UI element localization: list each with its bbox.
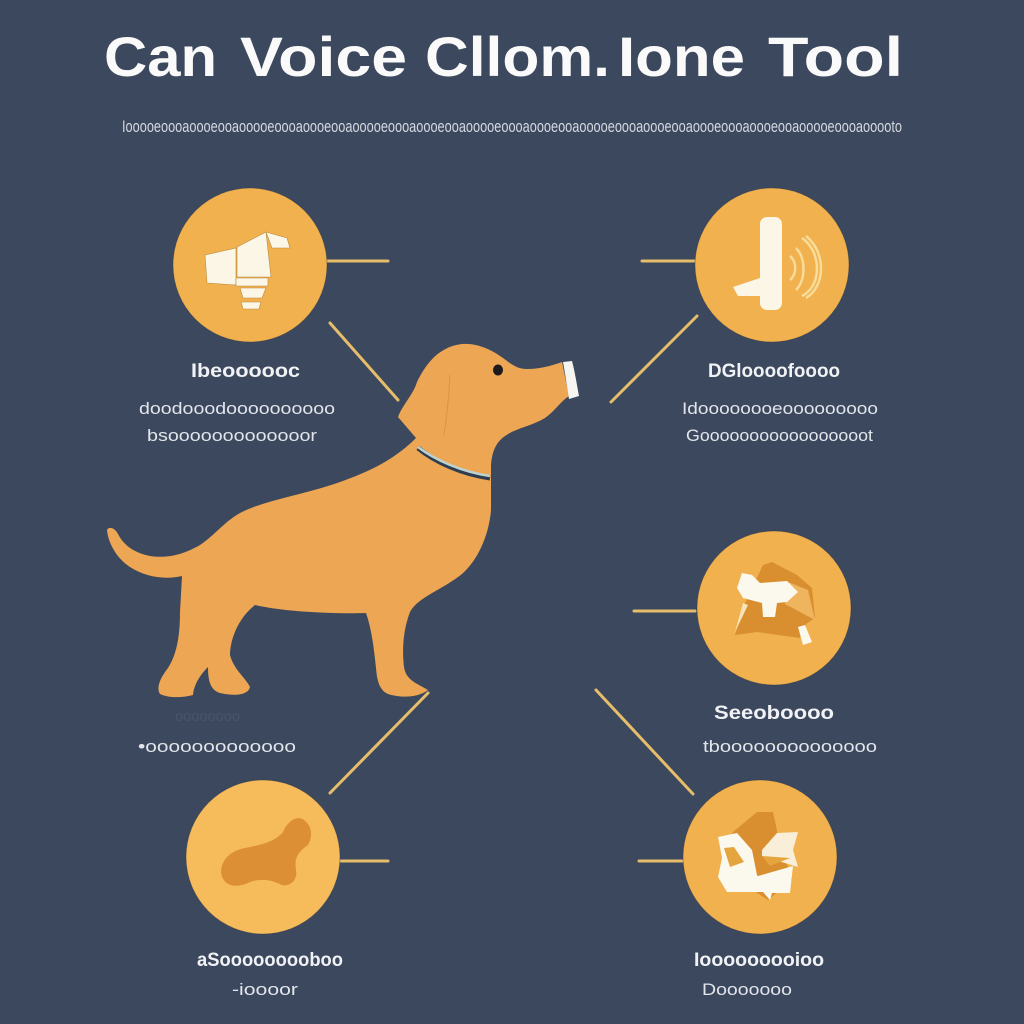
icon: megaphone (205, 232, 290, 309)
icon: crumpled star shape (718, 812, 798, 900)
circle (186, 780, 340, 934)
connector lines (327, 261, 697, 861)
circle (697, 531, 851, 685)
panel: middle right (697, 531, 877, 756)
circle (173, 188, 327, 342)
circle (695, 188, 849, 342)
title: Cllom. (425, 25, 610, 88)
faint heading: oooooooo (175, 708, 240, 725)
body line: -ioooor (232, 980, 298, 999)
body line: tboooooooooooooo (703, 737, 877, 756)
panel: bottom right (683, 780, 837, 999)
title: Voice (240, 25, 407, 88)
icon: speaker bar with sound waves (733, 217, 821, 310)
title: Ione (618, 25, 745, 88)
panel: bottom left (186, 780, 343, 999)
body line: Dooooooo (702, 980, 792, 999)
panel: top left megaphone (139, 188, 335, 445)
body line 2: bsooooooooooooor (147, 426, 317, 445)
body line: •ooooooooooooo (138, 737, 296, 756)
heading: aSooooooooboo (197, 950, 343, 971)
title (104, 25, 903, 88)
title: Tool (768, 25, 903, 88)
heading: Ibeoooooc (191, 361, 300, 382)
body line 1: Idoooooooeooooooooo (682, 399, 878, 418)
body line 2: Gooooooooooooooooot (686, 426, 873, 445)
title: Can (104, 25, 217, 88)
body line 1: doodooodoooooooooo (139, 399, 335, 418)
illustration: dog silhouette (107, 344, 579, 697)
heading: Iooooooooioo (694, 950, 824, 971)
heading: DGloooofoooo (708, 361, 840, 382)
icon: dog treat blob (221, 818, 311, 886)
icon: crumpled material (735, 562, 815, 645)
collar (418, 447, 490, 478)
circle (683, 780, 837, 934)
panel: top right sound device (682, 188, 878, 445)
ear crease (444, 375, 450, 435)
eye (493, 364, 503, 376)
heading: Seeoboooo (714, 703, 834, 724)
nose tip (563, 361, 579, 399)
text: under dog caption (138, 708, 296, 756)
